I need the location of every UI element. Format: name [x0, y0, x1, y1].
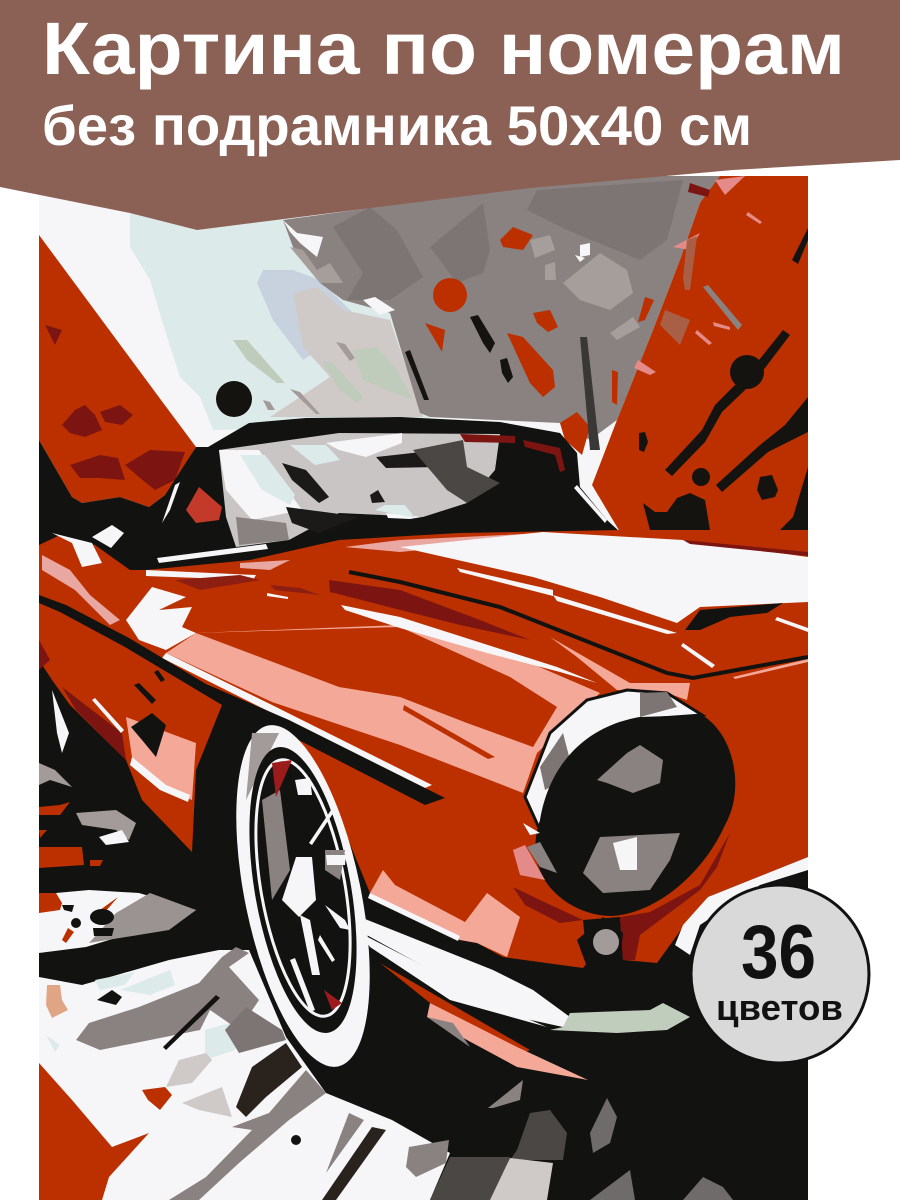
- bumper upper chrome strip: [368, 893, 460, 941]
- front wheel: [211, 714, 395, 1078]
- door white strip: [92, 698, 190, 802]
- red tongue over highlight: [196, 627, 557, 747]
- door dark red strip: [39, 640, 126, 760]
- hood pink streak: [550, 637, 808, 700]
- black splatter right: [639, 228, 808, 530]
- rear wheel crescent: [52, 690, 69, 753]
- headlight reflections: [527, 745, 680, 893]
- bottom grey shapes: [430, 1110, 567, 1200]
- ground white patch upper: [39, 890, 196, 953]
- dark red blotches: [45, 325, 185, 490]
- door black marks: [131, 670, 166, 757]
- ground pale clumps: [166, 1053, 232, 1117]
- windshield grey shapes: [413, 440, 500, 503]
- ground grey stroke: [76, 947, 259, 1050]
- ground grey lower strokes: [225, 1007, 286, 1053]
- red streaks in pink: [403, 705, 495, 759]
- white smoke patches: [283, 220, 590, 315]
- ground black dot: [291, 1135, 301, 1145]
- bottom light grey shape: [490, 1158, 553, 1200]
- headlight: [535, 715, 735, 916]
- dark red fleck: [688, 183, 710, 197]
- ground streak grey: [326, 1113, 364, 1173]
- thin white streak: [146, 570, 288, 599]
- pale blue sky: [130, 205, 430, 430]
- spokes: [282, 778, 350, 1012]
- mirror: [92, 525, 124, 548]
- headlight chrome: [525, 690, 702, 830]
- bottom left red corner: [39, 1063, 149, 1200]
- grey streak: [703, 285, 742, 330]
- grey drip: [580, 337, 600, 450]
- wedge flecks: [612, 176, 762, 405]
- lighter smoke: [290, 235, 640, 340]
- pink lower fender: [370, 870, 520, 957]
- ground dark stripe: [322, 1127, 386, 1200]
- bottom small fleck: [488, 1080, 523, 1108]
- windshield red reflection: [186, 487, 222, 523]
- red right wedge: [592, 176, 808, 532]
- crease black line: [39, 595, 445, 805]
- white streak on body: [341, 605, 597, 683]
- ground red fleck lower: [142, 1087, 172, 1110]
- hood scoop: [685, 603, 783, 630]
- ground grey right: [406, 1140, 449, 1177]
- badge: colour count: [691, 885, 869, 1063]
- header banner: [0, 0, 900, 230]
- badge number: 36: [741, 910, 816, 995]
- white tyre: [211, 714, 395, 1078]
- red flecks: [612, 297, 654, 405]
- windshield pale reflections: [240, 445, 415, 518]
- ground red fleck: [62, 928, 74, 943]
- ground grey in upper patch: [89, 893, 196, 943]
- hood white streaks: [457, 568, 808, 668]
- pink body highlight: [166, 625, 600, 793]
- panel: car painting: [39, 170, 808, 1200]
- rim black ring: [231, 739, 375, 1041]
- parking light: [593, 929, 619, 955]
- lilac haze: [257, 270, 352, 360]
- fender pink reflections: [42, 555, 120, 625]
- main white ground: [39, 950, 450, 1200]
- red splatter in smoke: [425, 227, 590, 455]
- brown fleck: [660, 236, 697, 345]
- left white fleck: [99, 830, 129, 845]
- windshield dark shapes: [282, 452, 428, 532]
- badge label: цветов: [716, 987, 843, 1028]
- darker smoke: [333, 180, 683, 300]
- dark red fragments: [175, 575, 320, 595]
- black splatter in smoke: [216, 315, 513, 417]
- windshield grey lower: [236, 517, 289, 545]
- dark red streaks on frame: [460, 434, 565, 472]
- tyre top grey: [246, 733, 279, 800]
- badge circle: [691, 885, 869, 1063]
- painting background: [39, 195, 618, 530]
- windshield pillar highlight: [162, 482, 607, 523]
- green-grey brush strokes: [233, 340, 413, 403]
- hood dark red strip: [683, 540, 808, 556]
- ground black flecks: [62, 905, 114, 936]
- door pink patch: [126, 717, 196, 800]
- pink flecks: [634, 176, 762, 375]
- dark red shadow around headlight: [513, 833, 730, 960]
- dark red stripe: [329, 580, 530, 640]
- crease white strip: [162, 653, 432, 788]
- skirt pink: [427, 1003, 588, 1080]
- hood crease line: [349, 572, 808, 678]
- left red flecks: [39, 802, 103, 868]
- car body upper: [39, 530, 808, 968]
- main bumper: [360, 917, 570, 1027]
- title: Картина по номерам: [42, 7, 845, 90]
- windshield glass: [219, 433, 500, 547]
- rim white ring: [239, 753, 367, 1023]
- ground orange fleck: [46, 985, 68, 1018]
- parking light mount: [577, 917, 623, 967]
- skirt grey: [427, 1017, 470, 1047]
- door panel: [39, 603, 222, 852]
- black background of car: [39, 417, 808, 1200]
- body top pink streaks: [240, 533, 545, 570]
- rim grey: [262, 790, 345, 900]
- beige haze: [270, 287, 423, 417]
- ground red patch: [39, 893, 118, 913]
- headlight chrome shading: [540, 692, 677, 790]
- small grey strokes: [263, 342, 355, 414]
- bottom oval grey shapes: [590, 1098, 733, 1200]
- grey smoke: [283, 170, 730, 440]
- fender white arc: [52, 533, 102, 567]
- fender white glare: [126, 587, 196, 650]
- window sill chrome: [157, 544, 268, 563]
- red around headlight pink: [513, 845, 545, 880]
- rim red fleck: [272, 760, 342, 1010]
- front chrome trim: [675, 857, 808, 955]
- ground black flecks lower: [97, 990, 220, 1050]
- body black line under fender: [365, 893, 470, 948]
- windshield highlights: [219, 433, 422, 520]
- skirt red: [380, 963, 530, 1053]
- subtitle: без подрамника 50х40 см: [42, 94, 752, 157]
- ground grey wide stroke: [169, 1070, 326, 1200]
- red left wedge: [39, 235, 196, 507]
- lower-left ground flecks: [39, 763, 136, 840]
- hood white panel: [400, 532, 808, 623]
- headlight white glints: [523, 823, 637, 870]
- ground dark brown stroke: [236, 1043, 302, 1117]
- bumper second chrome strip: [360, 933, 547, 1027]
- bumper mint chrome: [550, 1003, 690, 1033]
- pale ground tints: [46, 970, 240, 1060]
